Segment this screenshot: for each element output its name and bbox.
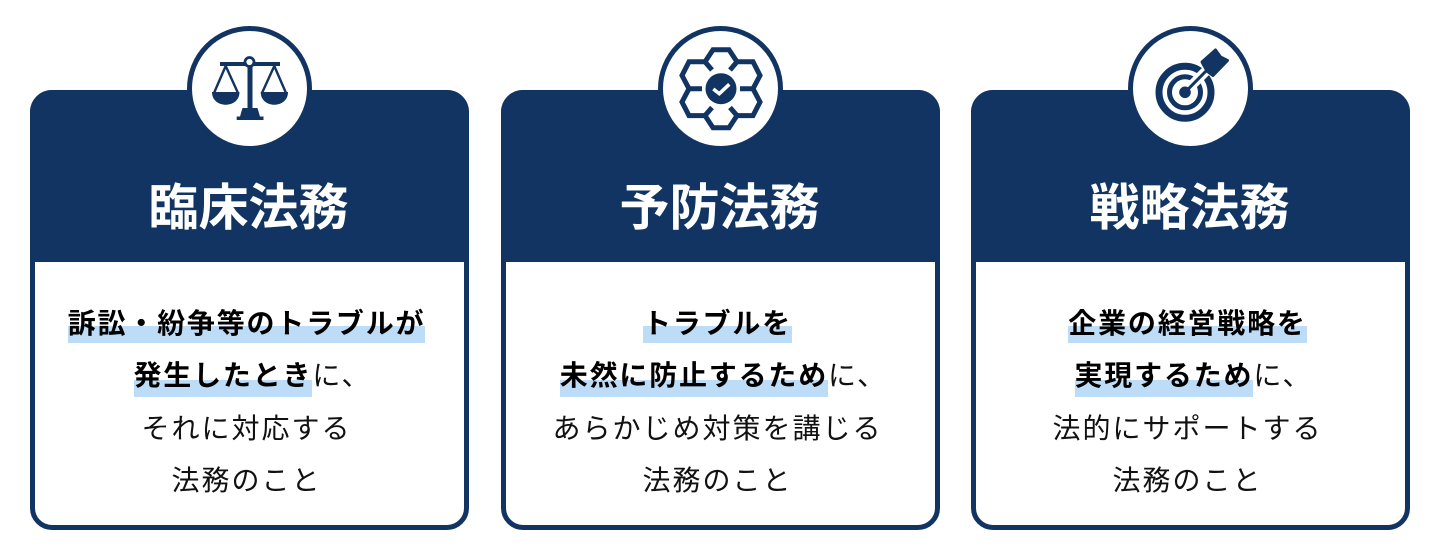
icon: target with arrow xyxy=(1128,26,1253,146)
description text: 法務のこと xyxy=(171,465,322,496)
description text xyxy=(1052,308,1322,496)
panel: 戦略法務 xyxy=(971,90,1410,530)
icon: hexagons with check xyxy=(658,26,783,146)
icon: scales xyxy=(187,26,312,146)
description text: 発生したとき xyxy=(134,360,312,391)
description text: それに対応する xyxy=(141,413,352,444)
panel: 予防法務 xyxy=(501,90,940,530)
description text: に、 xyxy=(312,360,372,391)
header band xyxy=(30,90,469,262)
header band xyxy=(501,90,940,262)
description text: 法的にサポートする xyxy=(1052,413,1322,444)
description text xyxy=(552,308,887,496)
description text: 訴訟・紛争等のトラブルが xyxy=(68,308,425,339)
header band xyxy=(971,90,1410,262)
description text: に、 xyxy=(828,360,887,391)
description text: 法務のこと xyxy=(642,465,792,496)
heading: 予防法務 xyxy=(620,180,820,236)
description text: 法務のこと xyxy=(1112,465,1262,496)
description text: に、 xyxy=(1253,360,1312,391)
heading: 臨床法務 xyxy=(148,180,348,236)
description text: トラブルを xyxy=(643,308,792,339)
panel: 臨床法務 xyxy=(30,90,469,530)
heading: 戦略法務 xyxy=(1090,180,1290,236)
description text: 実現するため xyxy=(1074,360,1253,391)
description text: あらかじめ対策を講じる xyxy=(552,413,882,444)
description text xyxy=(68,308,425,496)
description text: 企業の経営戦略を xyxy=(1068,308,1307,339)
description text: 未然に防止するため xyxy=(560,360,828,391)
